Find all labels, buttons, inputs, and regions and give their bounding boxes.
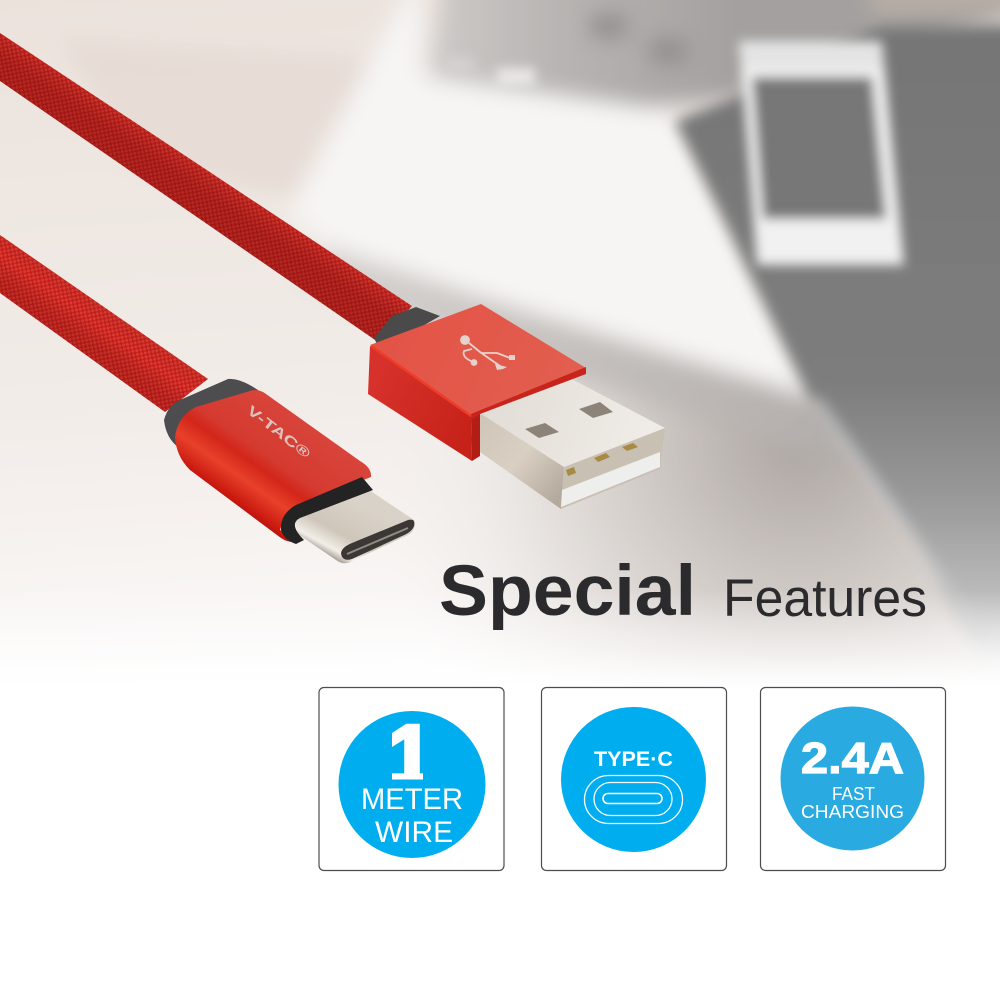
label: METER: METER (361, 783, 463, 816)
icon: usb-c port outline (584, 776, 682, 824)
plug white insulator (561, 452, 660, 507)
metal tongue (292, 488, 415, 563)
heading word: Features: Features (723, 569, 927, 628)
label: CHARGING: CHARGING (801, 802, 904, 822)
icon: blue circle (780, 706, 924, 850)
heading word: Special: Special (439, 552, 696, 631)
plug holes (525, 423, 559, 438)
metal plug side face (480, 413, 564, 509)
label: 1: 1 (387, 708, 433, 802)
V-TAC logo: V-TAC® (244, 403, 313, 461)
red housing top (370, 304, 586, 417)
USB strain relief (374, 307, 440, 346)
USB-A connector (368, 304, 665, 509)
label: FAST: FAST (832, 784, 875, 804)
title: Special Features (439, 552, 927, 631)
black inner ring (281, 477, 373, 544)
label: TYPE-C: TYPE·C (594, 748, 673, 771)
metal plug top face (480, 376, 665, 467)
USB-C opening (341, 520, 414, 560)
panel: 1 meter wire (319, 688, 504, 870)
USB trident logo (461, 336, 515, 370)
USB-C connector (164, 379, 415, 563)
label: WIRE: WIRE (375, 816, 453, 849)
red metal collar (175, 390, 371, 542)
label: 2.4A: 2.4A (801, 734, 904, 783)
red housing side (368, 346, 472, 461)
icon: blue circle (561, 707, 706, 852)
icon: blue circle (338, 711, 486, 858)
USB-A cable (0, 33, 440, 346)
panel: 2.4A fast charging (760, 688, 946, 870)
black strain relief (164, 379, 258, 447)
plug cavity (561, 428, 665, 509)
panel: type-c (542, 688, 726, 870)
USB-C cable (0, 235, 208, 412)
